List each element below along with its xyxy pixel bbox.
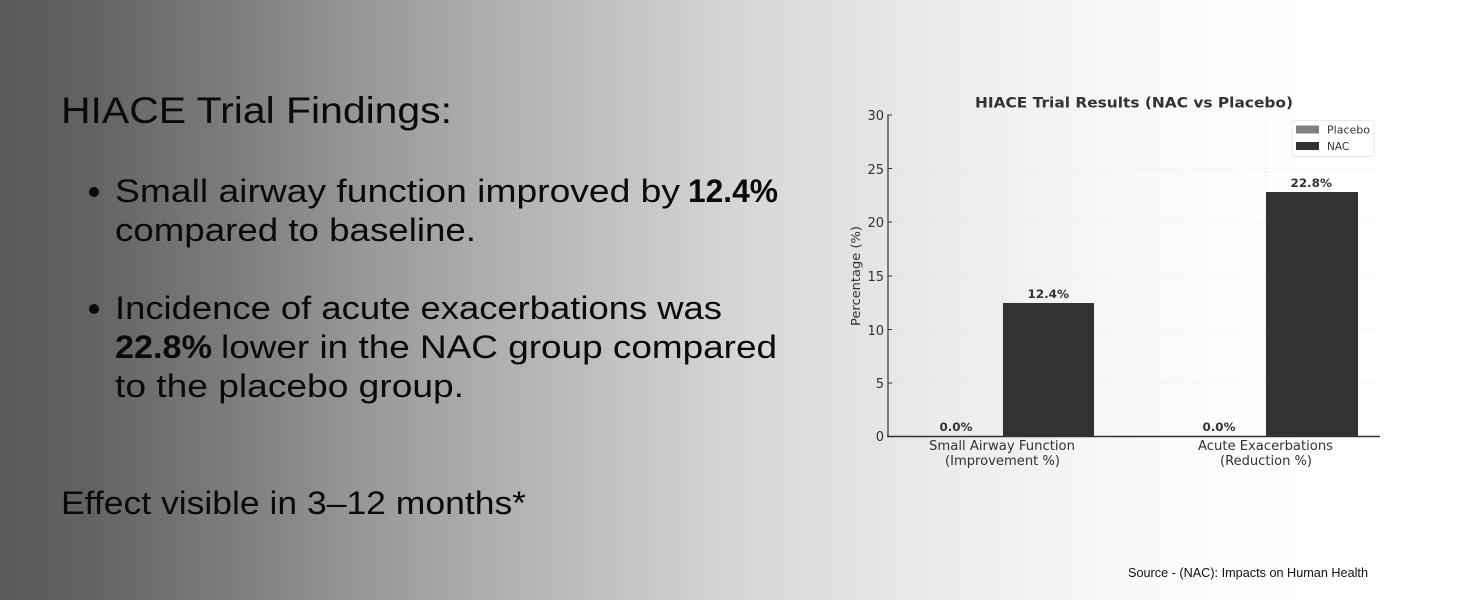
- x axis labels: (Improvement %): [945, 454, 1060, 469]
- value labels: 0.0%: [940, 420, 973, 434]
- y axis title: Percentage (%): [848, 226, 863, 326]
- value labels: [940, 176, 1332, 434]
- y axis tick labels: 5: [876, 377, 884, 392]
- bullet 1: Small airway function improved by: [115, 173, 680, 209]
- y axis tick labels: [867, 109, 884, 445]
- grid lines: [888, 115, 1380, 436]
- y axis tick labels: 30: [867, 109, 884, 124]
- y axis tick labels: 10: [867, 324, 884, 339]
- bullet 2: to the placebo group.: [115, 368, 464, 404]
- bullet list: [89, 173, 778, 404]
- bullet 1: compared to baseline.: [115, 212, 476, 248]
- heading: HIACE Trial Findings: HIACE Trial Findings:: [61, 90, 452, 131]
- chart title: HIACE Trial Results (NAC vs Placebo): [975, 96, 1293, 112]
- x axis labels: (Reduction %): [1220, 454, 1312, 469]
- legend: [1292, 120, 1374, 156]
- x axis labels: Small Airway Function: [929, 439, 1075, 454]
- value labels: 0.0%: [1202, 420, 1236, 434]
- y axis tick labels: 25: [867, 163, 884, 178]
- source note: Source - (NAC): Impacts on Human Health: [1128, 565, 1368, 580]
- x axis labels: [929, 439, 1333, 469]
- legend: Placebo: [1327, 124, 1370, 136]
- value labels: 22.8%: [1290, 176, 1332, 190]
- y axis tick labels: 15: [867, 270, 884, 285]
- legend: NAC: [1327, 141, 1349, 153]
- bullet 2: 22.8%: [115, 329, 212, 365]
- bar chart: [848, 96, 1380, 469]
- bullet 2: Incidence of acute exacerbations was: [115, 290, 722, 326]
- x axis labels: Acute Exacerbations: [1198, 439, 1333, 454]
- bars: NAC: [1003, 192, 1358, 436]
- y axis tick labels: 0: [876, 430, 884, 445]
- axes: [887, 114, 1380, 436]
- bullet 2: lower in the NAC group compared: [221, 329, 777, 365]
- bullet 1: [89, 173, 778, 248]
- value labels: 12.4%: [1028, 287, 1069, 301]
- bullet 2: [89, 290, 777, 404]
- text: effect timing: Effect visible in 3–12 months*: [61, 485, 526, 521]
- bullet 1: 12.4%: [688, 173, 778, 209]
- y axis tick labels: 20: [867, 216, 884, 231]
